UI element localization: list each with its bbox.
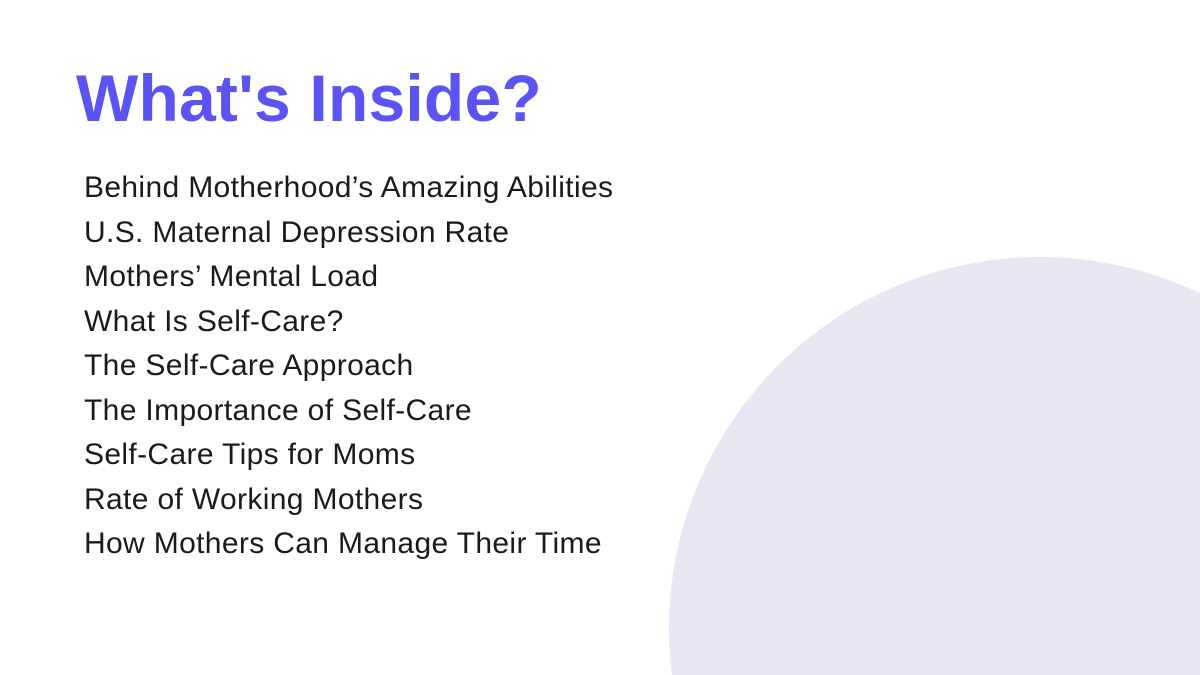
item 8: Rate of Working Mothers [84,482,423,516]
item 7: Self-Care Tips for Moms [84,438,415,471]
item 6: The Importance of Self-Care [84,394,472,426]
item 2: U.S. Maternal Depression Rate [84,216,509,248]
item 4: What Is Self-Care? [84,304,344,338]
title: What's Inside? [76,61,542,135]
contents list [84,171,613,560]
item 9: How Mothers Can Manage Their Time [84,527,602,560]
item 3: Mothers’ Mental Load [84,260,378,293]
item 5: The Self-Care Approach [84,349,414,382]
item 1: Behind Motherhood’s Amazing Abilities [84,171,613,204]
